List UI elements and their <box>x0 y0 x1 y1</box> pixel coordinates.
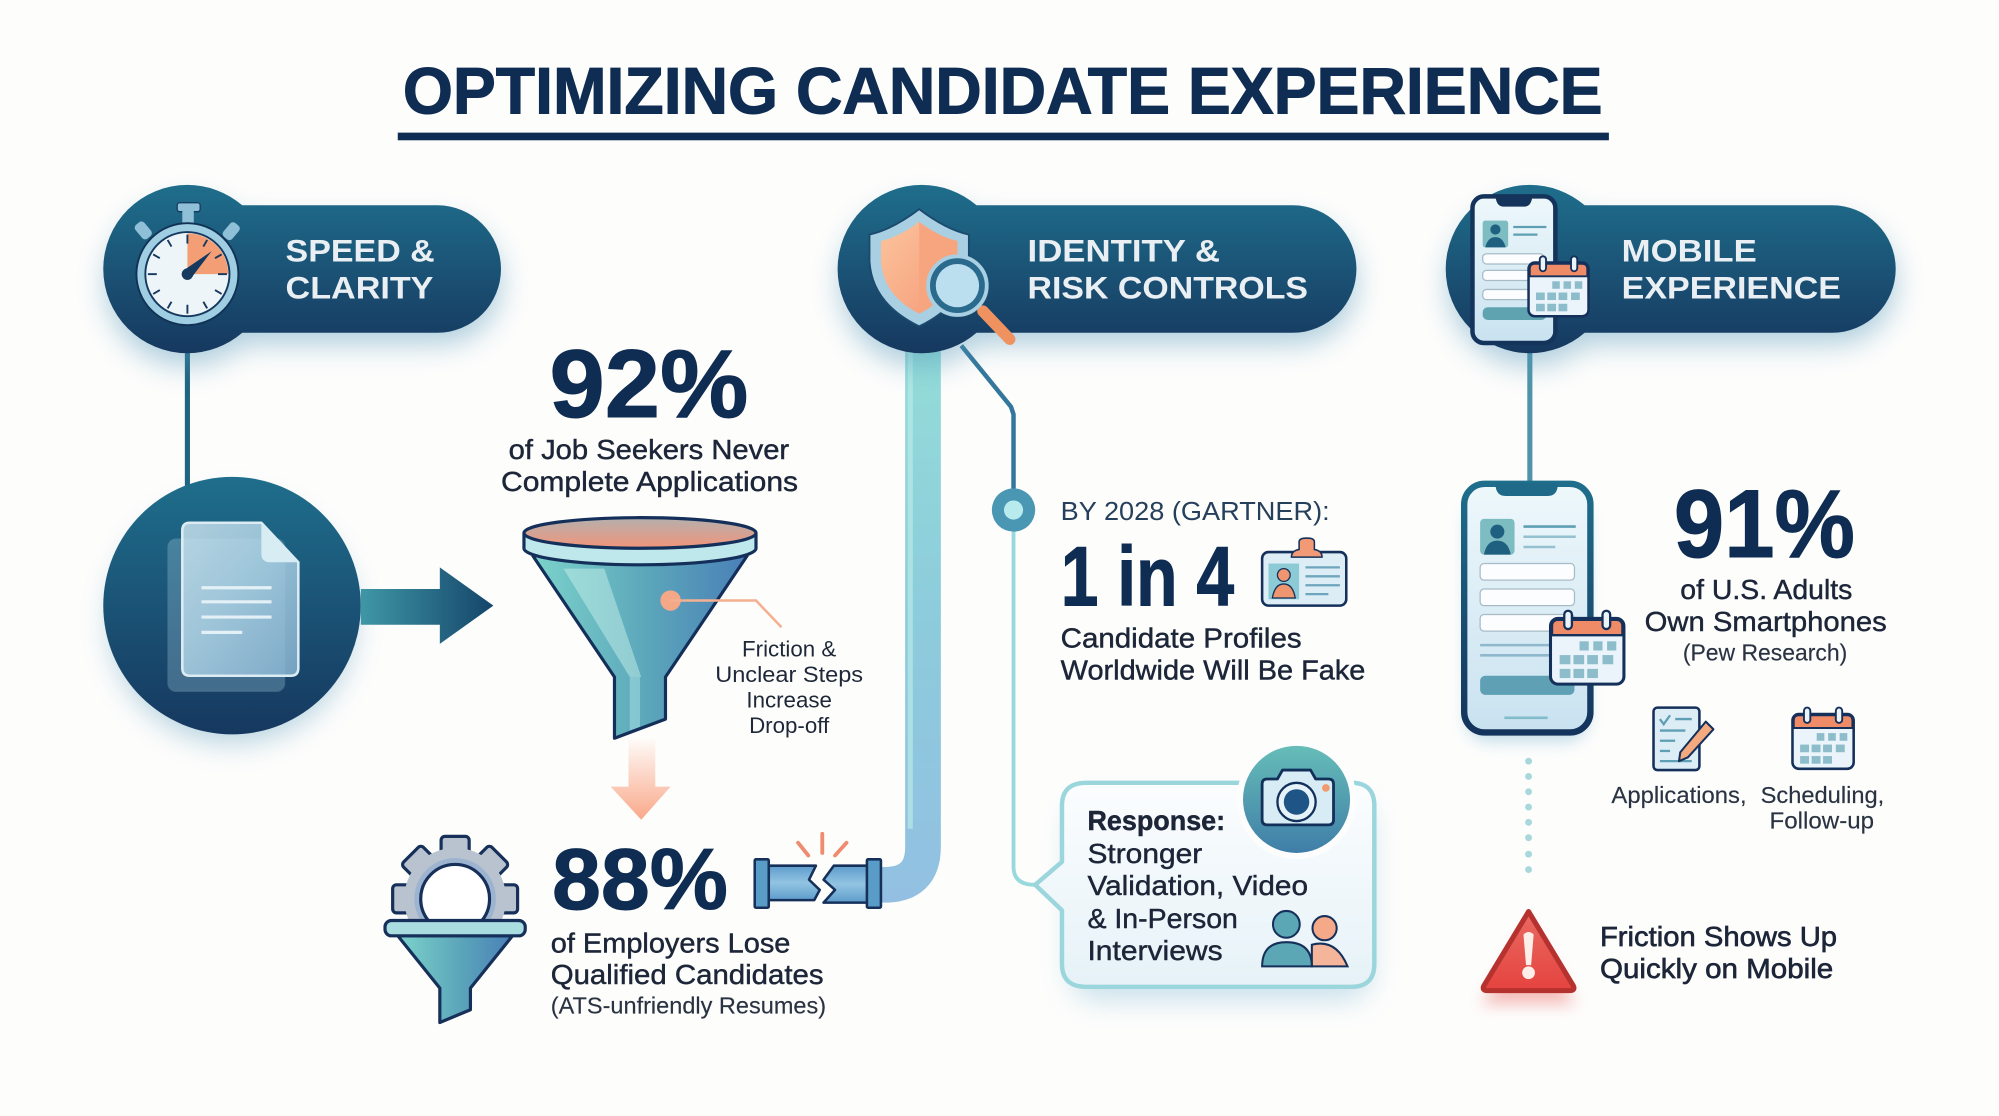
stat: 91 percent: (Pew Research) <box>1683 639 1847 665</box>
title: OPTIMIZING CANDIDATE EXPERIENCE <box>403 55 1603 129</box>
icon: large funnel <box>524 518 756 738</box>
icon: document circle <box>103 477 361 743</box>
text: mobile use labels: Applications, <box>1611 782 1747 808</box>
stat: 92 percent: Complete Applications <box>501 466 798 497</box>
pipe: leaking pipeline <box>755 347 923 908</box>
stat: 88 percent: Qualified Candidates <box>551 959 824 990</box>
text: mobile use labels <box>1611 782 1884 834</box>
icon: large phone <box>1464 483 1590 742</box>
stat: 88 percent <box>551 832 826 1019</box>
icon: shield with magnifier <box>869 209 1010 339</box>
text: response: Validation, Video <box>1087 870 1308 901</box>
icon: camera circle <box>1237 739 1356 859</box>
infographic canvas <box>90 67 1912 1024</box>
text: friction note: Unclear Steps <box>715 662 863 687</box>
text: response <box>1087 805 1308 966</box>
icon: header phone <box>1472 196 1555 343</box>
callout: friction marker <box>660 590 781 627</box>
icon: stopwatch <box>133 203 241 325</box>
header label: speed and clarity: CLARITY <box>286 269 433 305</box>
stat: 1 in 4: 1 in 4 <box>1061 530 1234 624</box>
header label: identity and risk controls <box>1028 232 1308 305</box>
text: friction warning: Quickly on Mobile <box>1600 953 1833 984</box>
stat: 88 percent: (ATS-unfriendly Resumes) <box>551 993 826 1019</box>
node: timeline marker <box>992 488 1035 532</box>
stat: 1 in 4: Candidate Profiles <box>1061 623 1302 654</box>
connector: teal callout line <box>1014 523 1035 885</box>
text: response: & In-Person <box>1087 903 1238 934</box>
arrow: to funnel <box>361 567 493 644</box>
header label: identity and risk controls: IDENTITY & <box>1028 232 1220 268</box>
stat: 92 percent <box>501 329 798 497</box>
connector: mobile column <box>1527 344 1532 487</box>
header label: mobile experience <box>1622 232 1841 305</box>
icon: people <box>1262 911 1348 966</box>
text: friction note: Friction & <box>742 637 836 662</box>
text: mobile use labels: Scheduling, <box>1761 782 1884 808</box>
header label: mobile experience: MOBILE <box>1622 232 1757 268</box>
stat: 1 in 4: Worldwide Will Be Fake <box>1061 655 1365 686</box>
panel: response callout <box>1035 739 1374 1000</box>
stat: 88 percent: of Employers Lose <box>551 927 790 958</box>
stat: 91 percent <box>1645 469 1887 665</box>
stat: 91 percent: 91% <box>1674 469 1855 578</box>
arrow: down <box>611 739 671 820</box>
text: response: Interviews <box>1087 935 1223 966</box>
text: friction note: Increase <box>746 688 832 713</box>
stat: 91 percent: of U.S. Adults <box>1680 574 1852 605</box>
icon: scheduling calendar <box>1792 708 1854 769</box>
text: friction note <box>715 637 863 738</box>
header label: speed and clarity <box>286 232 435 305</box>
text: response: Response: <box>1087 805 1225 836</box>
header: mobile experience <box>1446 185 1896 366</box>
header: speed and clarity <box>103 185 501 366</box>
text: mobile use labels: Follow-up <box>1770 808 1874 834</box>
text: response: Stronger <box>1087 838 1202 869</box>
stat: 1 in 4: BY 2028 (GARTNER): <box>1061 498 1330 526</box>
icon: application form with pencil <box>1654 708 1713 770</box>
stat: 1 in 4 <box>1061 498 1365 686</box>
header label: speed and clarity: SPEED & <box>286 232 435 268</box>
connector: identity line <box>961 346 1014 500</box>
header: identity and risk controls <box>838 185 1356 366</box>
connector: dotted line <box>1525 758 1532 873</box>
text: friction warning <box>1600 921 1837 984</box>
stat: 91 percent: Own Smartphones <box>1645 606 1887 637</box>
stat: 92 percent: 92% <box>549 329 748 438</box>
icon: header calendar <box>1529 256 1589 316</box>
icon: phone calendar <box>1550 611 1624 684</box>
stat: 88 percent: 88% <box>552 832 728 928</box>
icon: warning triangle <box>1481 912 1576 1005</box>
header label: mobile experience: EXPERIENCE <box>1622 269 1841 305</box>
icon: gear funnel <box>385 836 525 1022</box>
text: friction warning: Friction Shows Up <box>1600 921 1837 952</box>
icon: id badge <box>1262 538 1346 606</box>
header label: identity and risk controls: RISK CONTROLS <box>1028 269 1308 305</box>
connector: speed column <box>185 344 190 491</box>
text: friction note: Drop-off <box>749 713 830 738</box>
stat: 92 percent: of Job Seekers Never <box>509 434 789 465</box>
